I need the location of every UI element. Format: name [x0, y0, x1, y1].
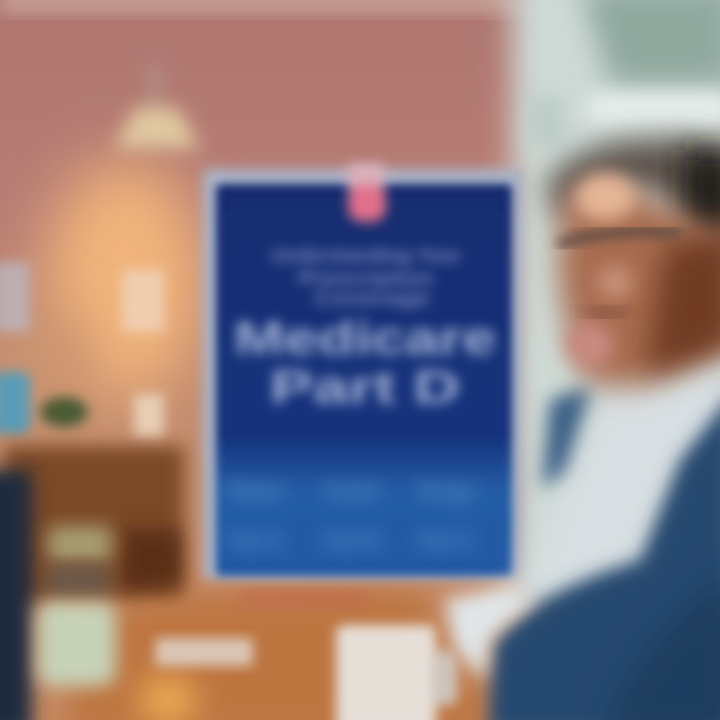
poster title — [234, 312, 496, 413]
cheek and smile — [597, 266, 633, 298]
glass jar on table — [38, 526, 116, 686]
jacket lapel left — [542, 385, 592, 490]
hair — [545, 139, 720, 260]
poster three column facts: Plans — [228, 478, 284, 503]
frame middle — [122, 270, 164, 332]
paper on table — [155, 638, 253, 666]
poster three column facts: Drugs — [419, 478, 475, 503]
dark left edge — [0, 470, 32, 720]
man with glasses — [445, 139, 720, 720]
poster white border — [203, 169, 523, 579]
white coffee mug — [336, 625, 458, 720]
wall glow from lamp — [45, 160, 205, 400]
blue screen — [0, 372, 30, 434]
poster body — [216, 184, 512, 576]
poster: Medicare Part D — [203, 164, 523, 579]
forehead highlight — [575, 173, 635, 221]
poster intro text: Prescription — [298, 268, 434, 290]
frame left — [0, 262, 30, 332]
poster three column facts — [228, 478, 475, 553]
wall frames — [0, 262, 164, 438]
pink clip at top — [348, 164, 386, 222]
poster title: Part D — [270, 361, 460, 413]
table top — [60, 590, 500, 720]
frame lower — [134, 394, 164, 438]
navy jacket — [488, 390, 720, 720]
poster three column facts: Part C — [419, 528, 475, 553]
bright window area, right — [512, 0, 720, 610]
face — [558, 189, 720, 385]
poster intro text: Coverage — [314, 288, 430, 310]
poster title: Medicare — [234, 312, 496, 364]
glasses — [558, 231, 680, 245]
white cuff and hand — [445, 585, 535, 680]
plant — [40, 397, 88, 427]
poster three column facts: Costs — [324, 478, 380, 503]
poster three column facts: Part B — [324, 528, 380, 553]
poster three column facts: Part A — [228, 528, 284, 553]
wooden shelf — [4, 446, 184, 601]
poster intro text: Understanding Your — [271, 245, 461, 267]
icon: pendant lamp — [115, 65, 200, 148]
shirt — [525, 345, 720, 610]
poster intro text — [271, 245, 461, 310]
